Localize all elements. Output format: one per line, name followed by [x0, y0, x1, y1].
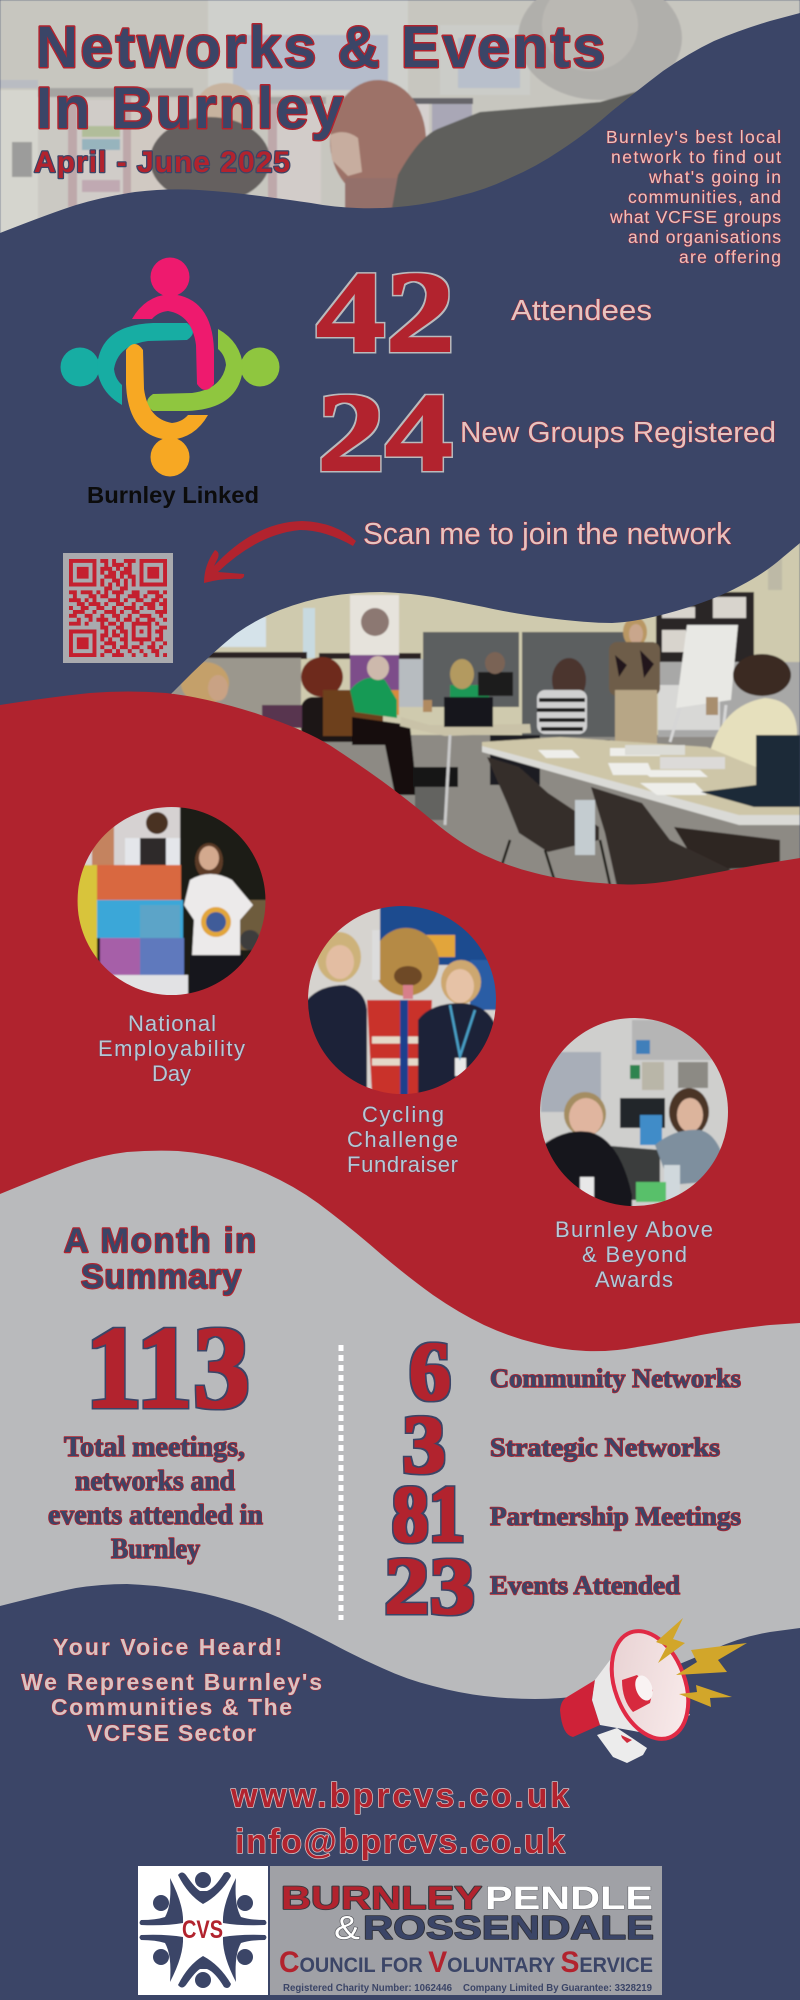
stat: events attended [384, 1541, 681, 1631]
photo: Burnley Above and Beyond Awards [539, 1017, 729, 1208]
red section background [0, 692, 800, 1400]
text: total meetings description: events attended in [48, 1500, 263, 1531]
stat: attendees [316, 249, 652, 377]
logo: Burnley Pendle and Rossendale CVS wordmark: BURNLEY [281, 1880, 482, 1916]
stat: attendees: Attendees [511, 295, 652, 327]
logo: Burnley Pendle and Rossendale CVS wordmark: & [334, 1909, 360, 1946]
stat: community networks [409, 1325, 741, 1418]
intro text: and organisations [628, 227, 781, 247]
icon: Burnley Linked logo: Burnley Linked [87, 482, 259, 508]
stat: strategic networks [402, 1398, 720, 1490]
arrow [204, 521, 356, 583]
call to action text: Scan me to join the network [363, 516, 731, 551]
caption: National Employability Day: National [128, 1011, 216, 1036]
navy footer background [0, 1584, 800, 2000]
photo: Cycling Challenge Fundraiser [307, 905, 497, 1095]
logo: CVS emblem: CVS [182, 1916, 223, 1944]
email link: info@bprcvs.co.uk [235, 1823, 565, 1861]
intro text: network to find out [611, 147, 781, 167]
intro text: communities, and [628, 187, 781, 207]
caption: Cycling Challenge Fundraiser: Cycling [362, 1102, 444, 1127]
photo: header meeting room [0, 0, 800, 240]
heading: A Month in Summary: A Month in [64, 1222, 256, 1260]
caption: Burnley Above and Beyond Awards: Burnley Above [555, 1217, 713, 1242]
intro text: what's going in [648, 167, 781, 187]
stat: community networks: 6 [409, 1325, 451, 1418]
logo: Burnley Pendle and Rossendale CVS wordmark: Company Limited By Guarantee: 3328219 [463, 1982, 652, 1994]
caption: Cycling Challenge Fundraiser: Challenge [347, 1127, 458, 1152]
text: total meetings description: Total meetings, [64, 1432, 245, 1463]
logo: Burnley Pendle and Rossendale CVS wordmark: COUNCIL FOR VOLUNTARY SERVICE [279, 1946, 653, 1979]
text: your voice heard: We Represent Burnley's [21, 1669, 322, 1695]
stat: partnership meetings: 81 [392, 1469, 465, 1559]
text: your voice heard: VCFSE Sector [87, 1720, 256, 1746]
stat: new groups registered: 24 [317, 371, 453, 495]
intro text [606, 127, 781, 267]
text: total meetings description: Burnley [111, 1534, 200, 1565]
photo: network meeting room [171, 543, 800, 884]
website link: www.bprcvs.co.uk [230, 1777, 569, 1815]
logo: Burnley Pendle and Rossendale CVS wordmark: PENDLE [485, 1880, 653, 1916]
logo: Burnley Pendle and Rossendale CVS wordmark: ROSSENDALE [363, 1909, 654, 1946]
stat: partnership meetings [392, 1469, 741, 1559]
icon: Burnley Linked logo [60, 258, 280, 508]
stat: events attended: 23 [384, 1541, 475, 1631]
stat: community networks: Community Networks [490, 1364, 741, 1393]
title [36, 15, 605, 141]
heading: A Month in Summary: Summary [81, 1258, 241, 1296]
stat: attendees: 42 [316, 249, 455, 377]
caption: National Employability Day [98, 1011, 245, 1086]
stat: events attended: Events Attended [490, 1571, 681, 1600]
intro text: what VCFSE groups [609, 207, 781, 227]
text: total meetings description: networks and [75, 1466, 235, 1497]
caption: National Employability Day: Employability [98, 1036, 245, 1061]
stat: strategic networks: 3 [402, 1398, 446, 1490]
grey section background [0, 1151, 800, 1700]
stat: new groups registered: New Groups Registered [460, 417, 776, 449]
caption: Burnley Above and Beyond Awards [555, 1217, 713, 1292]
text: total meetings description [48, 1432, 263, 1565]
photo: National Employability Day [77, 806, 267, 997]
text: your voice heard [21, 1634, 322, 1746]
logo: Burnley Pendle and Rossendale CVS wordmark [270, 1866, 662, 1995]
caption: Burnley Above and Beyond Awards: Awards [595, 1267, 673, 1292]
stat: partnership meetings: Partnership Meetings [490, 1502, 741, 1531]
title: In Burnley [36, 76, 343, 141]
caption: National Employability Day: Day [152, 1061, 191, 1086]
date subtitle: April - June 2025 [34, 146, 290, 179]
intro text: Burnley's best local [606, 127, 781, 147]
QR code [63, 553, 173, 663]
stat: new groups registered [317, 371, 776, 495]
logo: CVS emblem [138, 1866, 268, 1995]
intro text: are offering [679, 247, 781, 267]
heading: A Month in Summary [64, 1222, 256, 1296]
title: Networks & Events [36, 15, 605, 80]
text: your voice heard: Your Voice Heard! [53, 1634, 282, 1660]
stat: 113 total: 113 [85, 1302, 250, 1433]
caption: Cycling Challenge Fundraiser [347, 1102, 458, 1177]
caption: Cycling Challenge Fundraiser: Fundraiser [347, 1152, 458, 1177]
logo: Burnley Pendle and Rossendale CVS wordmark: Registered Charity Number: 1062446 [283, 1982, 452, 1994]
icon: megaphone [560, 1618, 747, 1763]
text: your voice heard: Communities & The [51, 1694, 292, 1720]
caption: Burnley Above and Beyond Awards: & Beyond [582, 1242, 687, 1267]
stat: strategic networks: Strategic Networks [490, 1433, 720, 1462]
